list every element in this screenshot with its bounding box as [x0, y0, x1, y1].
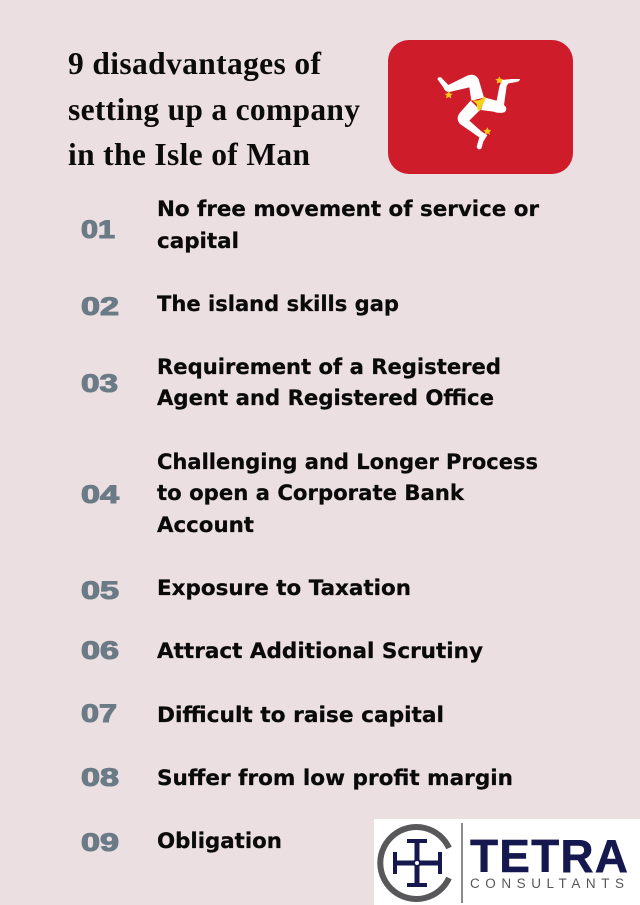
- logo: Tetra Consultants: TETRA: [470, 830, 628, 882]
- list item 02: 02: [81, 293, 119, 321]
- list item 02: The island skills gap: [157, 292, 399, 316]
- list item 06: Attract Additional Scrutiny: [157, 639, 483, 663]
- list item 08: Suffer from low profit margin: [157, 766, 513, 790]
- list item 05: 05: [81, 577, 119, 605]
- list item 09: 09: [81, 829, 119, 857]
- title: in the Isle of Man: [68, 137, 310, 172]
- list item 01: No free movement of service or: [157, 197, 540, 221]
- list item 06: 06: [81, 637, 119, 665]
- list item 05: Exposure to Taxation: [157, 576, 411, 600]
- icon: Isle of Man flag: [388, 40, 573, 174]
- list item 06: [81, 637, 483, 665]
- list item 04: to open a Corporate Bank: [157, 481, 465, 505]
- title: [68, 46, 360, 172]
- list item 04: Challenging and Longer Process: [157, 450, 538, 474]
- list item 03: [81, 355, 501, 410]
- list item 01: capital: [157, 229, 239, 253]
- list item 04: Account: [157, 513, 254, 537]
- list item 09: [81, 829, 282, 857]
- logo: Tetra Consultants: CONSULTANTS: [470, 876, 624, 891]
- list item 02: [81, 292, 399, 321]
- list item 07: 07: [81, 700, 117, 728]
- list item 03: Agent and Registered Office: [157, 386, 494, 410]
- list item 07: [81, 700, 444, 728]
- list item 01: 01: [81, 216, 115, 244]
- list item 03: 03: [81, 370, 118, 398]
- list item 08: [81, 764, 513, 792]
- list item 05: [81, 576, 411, 605]
- list item 04: [81, 450, 538, 537]
- list item 03: Requirement of a Registered: [157, 355, 501, 379]
- list item 07: Difficult to raise capital: [157, 703, 444, 727]
- title: 9 disadvantages of: [68, 46, 322, 81]
- list item 09: Obligation: [157, 829, 282, 853]
- title: setting up a company: [68, 92, 360, 127]
- logo: Tetra Consultants: [374, 819, 640, 905]
- list item 04: 04: [81, 481, 119, 509]
- list item 01: [81, 197, 540, 253]
- list item 08: 08: [81, 764, 119, 792]
